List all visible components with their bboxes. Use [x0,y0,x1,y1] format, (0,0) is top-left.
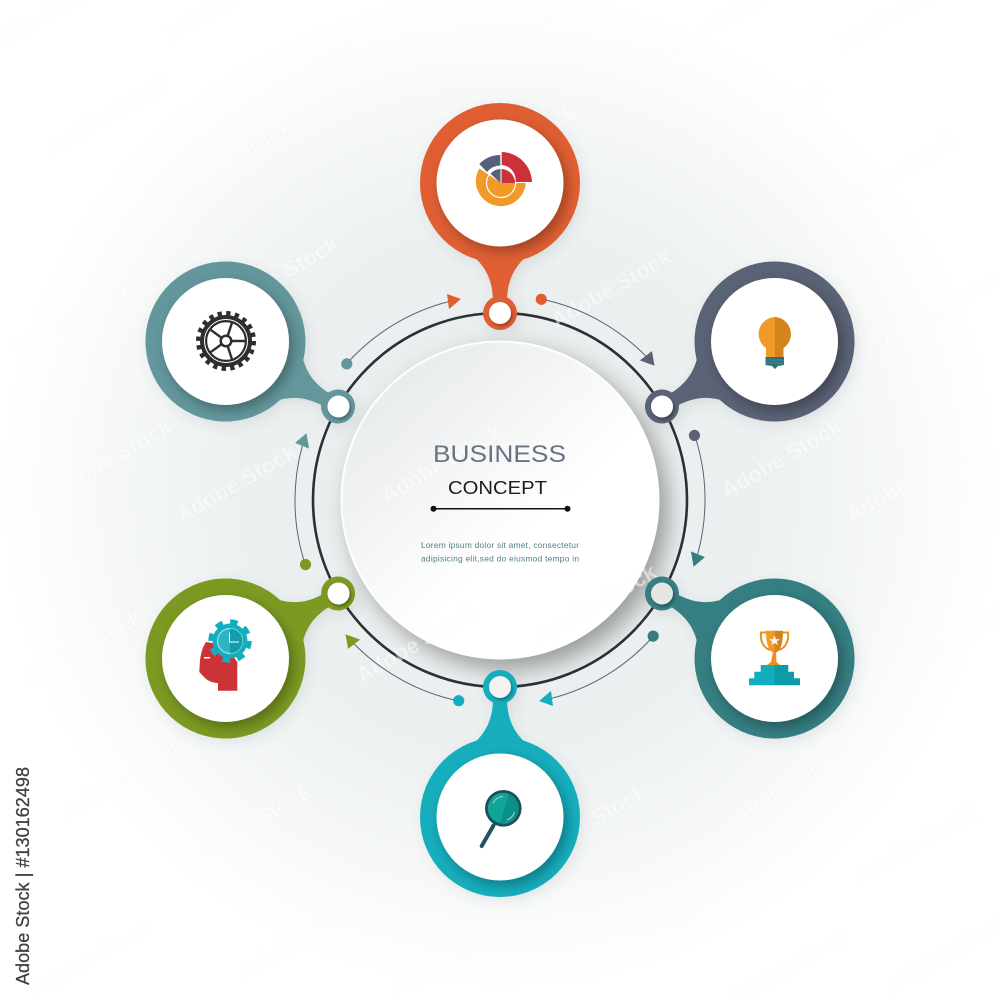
watermark pattern: Adobe Stock [532,559,661,648]
icon: cog wheel [199,314,253,368]
icon: head with clock gear [199,622,249,691]
arrow: bottom to lower left [341,629,464,706]
disc drop shadow [341,341,659,659]
watermark pattern: Adobe Stock [7,274,136,363]
watermark pattern: Adobe Stock [42,71,171,160]
watermark pattern: Adobe Stock [842,439,971,528]
arrow: upper left to top [339,273,461,392]
title text block [421,441,579,564]
pin: bottom cyan [420,670,580,897]
watermark pattern: Adobe Stock [377,419,506,508]
pin: lower right dark teal [644,576,859,744]
watermark pattern: Adobe Stock [60,734,189,823]
watermark pattern: Adobe Stock [832,127,961,216]
pin: top orange [420,103,580,330]
pin: upper left light teal [145,262,358,428]
watermark pattern: Adobe Stock [452,99,581,188]
watermark pattern: Adobe Stock [717,414,846,503]
pin: lower left green [145,576,358,744]
watermark pattern: Adobe Stock [522,779,651,868]
watermark pattern: Adobe Stock [47,414,176,503]
heading: concept: CONCEPT [448,477,547,498]
watermark pattern: Adobe Stock [237,894,366,983]
icon: donut chart [476,152,532,206]
arrow: lower right to bottom [539,608,661,727]
heading: business: BUSINESS [433,441,566,468]
arrow: top to upper right [536,294,659,371]
watermark pattern: Adobe Stock [167,114,296,203]
watermark pattern: Adobe Stock [352,599,481,688]
watermark pattern: Adobe Stock [572,899,701,988]
watermark pattern: Adobe Stock [727,739,856,828]
central disc with shadow and outer ring [313,313,687,687]
icon: trophy on podium [749,631,800,685]
body text [421,540,579,564]
body text: Lorem ipsum dolor sit amet, consectetur [421,540,579,550]
arrow: upper right to lower right [645,428,747,569]
watermark pattern: Adobe Stock [704,74,833,163]
arrow: lower left to upper left [253,431,355,572]
watermark pattern: Adobe Stock [17,604,146,693]
watermark pattern: Adobe Stock [852,799,981,888]
stock id side text: Adobe Stock | #130162498 [13,767,33,985]
pin: upper right slate [644,262,859,428]
inner disc [342,342,658,658]
watermark pattern: Adobe Stock [547,244,676,333]
outer dark ring [313,313,687,687]
icon: magnifying glass [482,790,522,846]
watermark pattern: Adobe Stock [214,231,343,320]
watermark pattern: Adobe Stock [172,439,301,528]
divider line with end dots [430,506,570,512]
body text: adipisicing elit,sed do eiusmod tempo in [421,554,579,564]
watermark pattern: Adobe Stock [187,779,316,868]
icon: light bulb [759,317,791,369]
